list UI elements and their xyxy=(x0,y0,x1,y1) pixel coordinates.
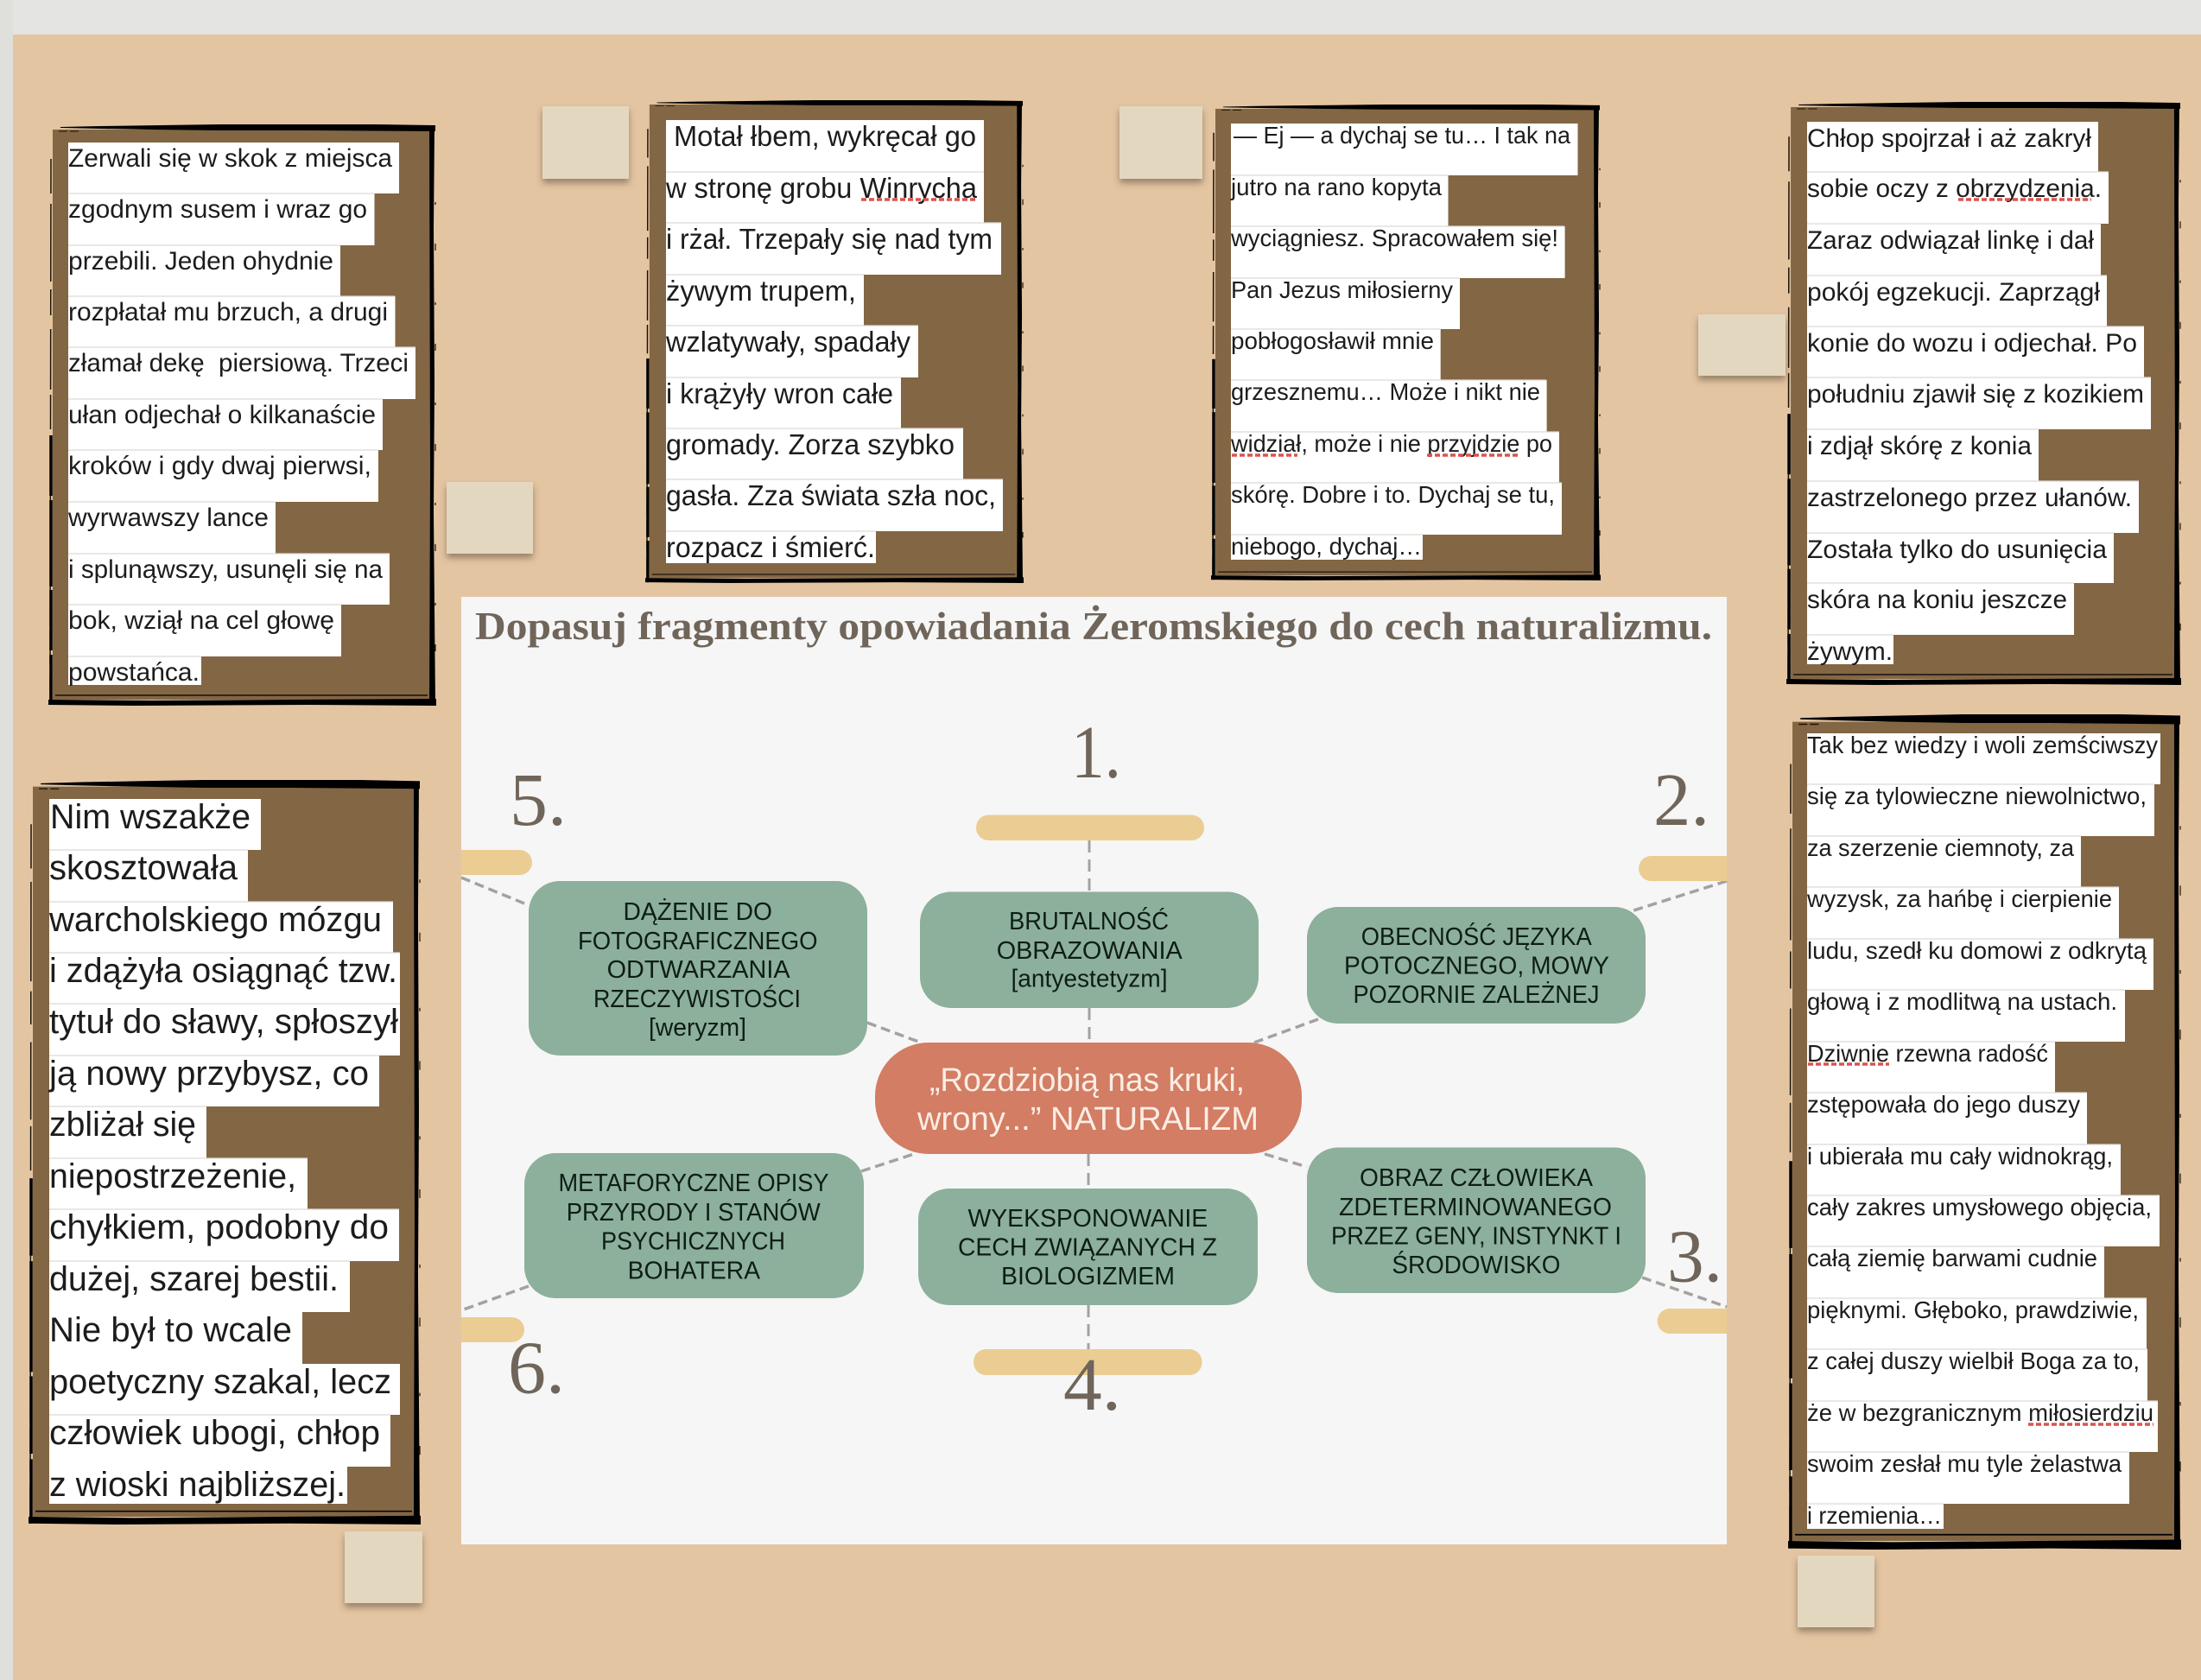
node: obraz człowieka: OBRAZ CZŁOWIEKA xyxy=(1360,1164,1594,1192)
node: brutalność obrazowania xyxy=(920,891,1259,1008)
text block xyxy=(665,120,1003,563)
text block: swoim zesłał mu tyle żelastwa xyxy=(1807,1450,2122,1477)
text block: widział, może i nie przyjdzie po xyxy=(1230,430,1552,457)
text block: pokój egzekucji. Zaprzągł xyxy=(1807,278,2100,307)
app chrome strip left xyxy=(0,0,13,1680)
panel: fragment Ej a dychaj xyxy=(1211,105,1601,580)
text block: Motał łbem, wykręcał go xyxy=(674,120,976,152)
text block: wzlatywały, spadały xyxy=(665,326,910,358)
text block: Dziwnie rzewna radość xyxy=(1807,1040,2048,1067)
text block: z wioski najbliższej. xyxy=(49,1466,346,1504)
numbers 1 to 6: 5. xyxy=(510,758,567,841)
panel: fragment Nim wszakże xyxy=(29,780,421,1525)
central node xyxy=(875,1043,1302,1154)
text block: chyłkiem, podobny do xyxy=(49,1208,389,1246)
text block: cały zakres umysłowego objęcia, xyxy=(1807,1194,2152,1220)
text block: wyciągniesz. Spracowałem się! xyxy=(1230,225,1558,251)
text block: człowiek ubogi, chłop xyxy=(49,1414,380,1452)
text block: pięknymi. Głęboko, prawdziwie, xyxy=(1807,1296,2139,1323)
numbers 1 to 6: 2. xyxy=(1653,758,1709,841)
node: metaforyczne opisy xyxy=(524,1153,864,1298)
numbers 1 to 6 xyxy=(508,710,1722,1426)
answer box 1 xyxy=(447,482,533,554)
text block: zstępowała do jego duszy xyxy=(1807,1091,2080,1118)
text block: skóra na koniu jeszcze xyxy=(1807,586,2067,614)
node: dążenie do fotograficznego: ODTWARZANIA xyxy=(607,956,790,984)
text block: rozpacz i śmierć. xyxy=(666,531,875,563)
text block: grzesznemu… Może i nikt nie xyxy=(1231,378,1540,405)
text block: Pan Jezus miłosierny xyxy=(1231,276,1453,303)
node: brutalność obrazowania: [antyestetyzm] xyxy=(1011,966,1168,993)
text block: konie do wozu i odjechał. Po xyxy=(1807,329,2137,358)
text block: żywym. xyxy=(1807,637,1893,666)
numbers 1 to 6: 3. xyxy=(1667,1214,1722,1297)
text block: skórę. Dobre i to. Dychaj se tu, xyxy=(1231,481,1555,508)
text block: zastrzelonego przez ułanów. xyxy=(1807,484,2132,512)
node: dążenie do fotograficznego: FOTOGRAFICZNEGO xyxy=(578,928,817,955)
text block: Nie był to wcale xyxy=(49,1311,292,1349)
node: obraz człowieka xyxy=(1307,1147,1646,1293)
text block: bok, wziął na cel głowę xyxy=(68,606,334,635)
node: obecność języka potocznego xyxy=(1307,907,1646,1024)
node: brutalność obrazowania: BRUTALNOŚĆ xyxy=(1009,906,1169,935)
text block xyxy=(48,798,400,1504)
text block: — Ej — a dychaj se tu… I tak na xyxy=(1234,122,1571,149)
node: metaforyczne opisy: PRZYRODY I STANÓW xyxy=(567,1198,821,1227)
text block xyxy=(1807,122,2151,666)
node: wyeksponowanie cech: CECH ZWIĄZANYCH Z xyxy=(958,1234,1217,1262)
text block: za szerzenie ciemnoty, za xyxy=(1807,834,2075,861)
text block: i splunąwszy, usunęli się na xyxy=(68,555,383,584)
node: obecność języka potocznego: POTOCZNEGO, MOWY xyxy=(1344,952,1609,979)
text block: Zaraz odwiązał linkę i dał xyxy=(1807,226,2094,255)
node: wyeksponowanie cech: BIOLOGIZMEM xyxy=(1001,1263,1175,1290)
panel: fragment Motał łbem xyxy=(645,100,1024,583)
text block: niepostrzeżenie, xyxy=(49,1157,296,1195)
text block: niebogo, dychaj… xyxy=(1231,533,1422,560)
answer box 6 xyxy=(1798,1556,1874,1627)
text block: zbliżał się xyxy=(49,1106,196,1144)
text block: ułan odjechał o kilkanaście xyxy=(68,401,376,429)
text block: i rzemienia… xyxy=(1807,1502,1942,1529)
connector lines xyxy=(461,840,1727,1349)
node: dążenie do fotograficznego: DĄŻENIE DO xyxy=(624,897,772,926)
text block: sobie oczy z obrzydzenia. xyxy=(1807,174,2102,203)
text block: gasła. Zza świata szła noc, xyxy=(666,479,996,511)
node: wyeksponowanie cech: WYEKSPONOWANIE xyxy=(967,1205,1208,1233)
text block: i zdjął skórę z konia xyxy=(1807,432,2032,460)
text block: przebili. Jeden ohydnie xyxy=(68,247,333,276)
text block: z całej duszy wielbił Boga za to, xyxy=(1807,1347,2140,1374)
text block: warcholskiego mózgu xyxy=(48,901,382,939)
panel: fragment Chłop spojrzał xyxy=(1786,102,2181,685)
node: metaforyczne opisy: BOHATERA xyxy=(628,1258,761,1285)
text block: ją nowy przybysz, co xyxy=(48,1055,369,1093)
text block: w stronę grobu Winrycha xyxy=(665,172,978,204)
text block: głową i z modlitwą na ustach. xyxy=(1807,988,2117,1015)
frame xyxy=(1211,105,1601,580)
text block: Została tylko do usunięcia xyxy=(1807,536,2107,564)
node: dążenie do fotograficznego: [weryzm] xyxy=(649,1014,746,1042)
central node: „Rozdziobią nas kruki, xyxy=(929,1062,1245,1099)
node: wyeksponowanie cech xyxy=(918,1189,1258,1305)
text block: ludu, szedł ku domowi z odkrytą xyxy=(1807,937,2147,964)
panel: fragment Tak bez wiedzy xyxy=(1788,714,2181,1550)
frame xyxy=(29,780,421,1525)
frame xyxy=(1786,102,2181,685)
text block: skosztowała xyxy=(49,849,238,887)
text block: jutro na rano kopyta xyxy=(1230,174,1443,200)
answer box 4 xyxy=(1698,314,1786,376)
text block: rozpłatał mu brzuch, a drugi xyxy=(68,298,388,326)
text block: kroków i gdy dwaj pierwsi, xyxy=(68,452,371,480)
numbers 1 to 6: 1. xyxy=(1071,710,1121,794)
frame xyxy=(1788,714,2181,1550)
frame xyxy=(48,124,436,706)
node: metaforyczne opisy: PSYCHICZNYCH xyxy=(601,1227,785,1255)
text block: złamał dekę piersiową. Trzeci xyxy=(68,349,409,377)
node: obraz człowieka: ŚRODOWISKO xyxy=(1392,1250,1560,1279)
text block: się za tylowieczne niewolnictwo, xyxy=(1807,783,2147,809)
node: obecność języka potocznego: POZORNIE ZALEŻNEJ xyxy=(1353,980,1600,1009)
text block: i krążyły wron całe xyxy=(666,377,893,409)
node: brutalność obrazowania: OBRAZOWANIA xyxy=(997,937,1183,965)
node: dążenie do fotograficznego xyxy=(529,881,867,1056)
text block: pobłogosławił mnie xyxy=(1231,327,1434,354)
text block: tytuł do sławy, spłoszył xyxy=(49,1003,398,1041)
numbers 1 to 6: 6. xyxy=(508,1325,565,1410)
central node: wrony...” NATURALIZM xyxy=(917,1101,1259,1138)
text block: powstańca. xyxy=(68,658,200,687)
text block xyxy=(1806,732,2160,1529)
text block: Tak bez wiedzy i woli zemściwszy xyxy=(1807,732,2158,758)
frame xyxy=(645,100,1024,583)
node: obraz człowieka: ZDETERMINOWANEGO xyxy=(1339,1194,1612,1221)
text block xyxy=(67,143,415,687)
text block: południu zjawił się z kozikiem xyxy=(1807,380,2144,409)
node: obecność języka potocznego: OBECNOŚĆ JĘZYKA xyxy=(1361,922,1592,951)
text block: gromady. Zorza szybko xyxy=(666,428,955,460)
text block xyxy=(1230,122,1577,560)
text block: i ubierała mu cały widnokrąg, xyxy=(1807,1143,2113,1170)
answer box 5 xyxy=(345,1531,422,1603)
node: metaforyczne opisy: METAFORYCZNE OPISY xyxy=(558,1170,829,1197)
text block: i zdążyła osiągnąć tzw. xyxy=(49,952,397,990)
text block: że w bezgranicznym miłosierdziu xyxy=(1807,1399,2153,1426)
answer box 3 xyxy=(1120,106,1202,179)
title: Dopasuj fragmenty opowiadania Żeromskiego do cech naturalizmu. xyxy=(475,604,1712,648)
panel: fragment Zerwali się xyxy=(48,124,436,706)
answer pills xyxy=(432,815,1761,1375)
panel: mind map card xyxy=(432,597,1761,1544)
text block: wyzysk, za hańbę i cierpienie xyxy=(1806,885,2112,912)
text block: dużej, szarej bestii. xyxy=(49,1260,339,1298)
text block: zgodnym susem i wraz go xyxy=(68,195,367,224)
text block: Chłop spojrzał i aż zakrył xyxy=(1807,124,2091,153)
text block: żywym trupem, xyxy=(666,275,856,307)
text block: całą ziemię barwami cudnie xyxy=(1807,1245,2097,1271)
text block: i rżał. Trzepały się nad tym xyxy=(666,223,993,255)
text block: poetyczny szakal, lecz xyxy=(49,1363,391,1401)
text block: wyrwawszy lance xyxy=(67,504,269,532)
numbers 1 to 6: 4. xyxy=(1063,1342,1121,1426)
answer box 2 xyxy=(542,106,629,179)
text block: Zerwali się w skok z miejsca xyxy=(68,144,392,173)
app chrome strip top xyxy=(0,0,2201,35)
node: dążenie do fotograficznego: RZECZYWISTOŚCI xyxy=(593,984,801,1013)
text block: Nim wszakże xyxy=(50,798,251,836)
node: obraz człowieka: PRZEZ GENY, INSTYNKT I xyxy=(1331,1223,1621,1251)
